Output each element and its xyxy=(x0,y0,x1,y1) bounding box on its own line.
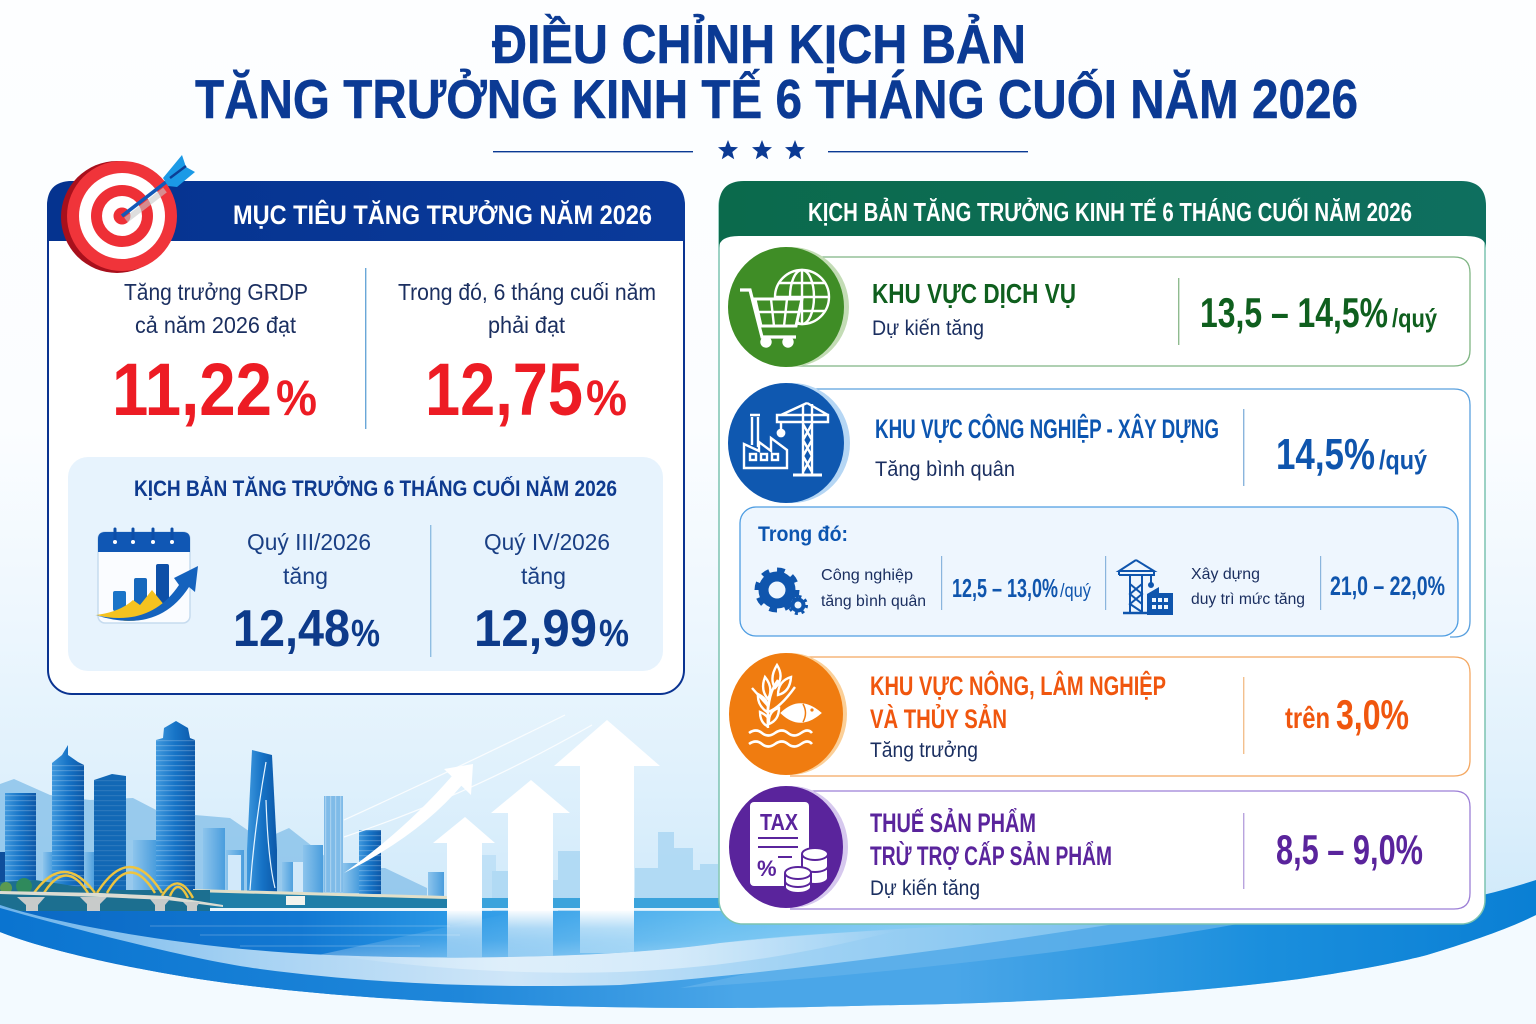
row: product tax: TRỪ TRỢ CẤP SẢN PHẨM xyxy=(870,839,1112,871)
row: services: Dự kiến tăng xyxy=(872,317,984,340)
title: ĐIỀU CHỈNH KỊCH BẢN xyxy=(492,13,1026,75)
far bank xyxy=(193,891,447,910)
white growth arrows xyxy=(433,720,660,957)
sub-card: breakdown: /quý xyxy=(1060,581,1091,602)
divider xyxy=(430,525,431,657)
row: agriculture, forestry, fishery: trên xyxy=(1285,702,1330,735)
divider xyxy=(365,268,366,429)
stat: GRDP full year xyxy=(112,279,317,431)
mountains xyxy=(0,779,427,915)
row: product tax xyxy=(729,786,1470,909)
panel header xyxy=(47,181,685,241)
row: industry and construction: KHU VỰC CÔNG NGHIỆP - XÂY DỰNG xyxy=(875,413,1219,444)
stat: GRDP full year: % xyxy=(276,370,317,426)
stat: Q3: tăng xyxy=(283,563,328,589)
title xyxy=(195,13,1358,130)
stat: Q4 xyxy=(474,529,629,658)
title ornament: stars xyxy=(493,140,1028,159)
bridge xyxy=(0,867,223,914)
curved arrow xyxy=(344,764,473,873)
row: product tax: 8,5 – 9,0% xyxy=(1276,826,1423,873)
stat: last 6 months: Trong đó, 6 tháng cuối năm xyxy=(398,279,656,305)
icon: tax document and coins: TAX xyxy=(760,809,799,835)
row: agriculture, forestry, fishery: VÀ THỦY SẢN xyxy=(870,702,1007,734)
row: industry and construction: Tăng bình quân xyxy=(875,458,1015,481)
row: agriculture, forestry, fishery xyxy=(729,653,1470,776)
icon: calendar with chart xyxy=(95,529,198,623)
row: services: KHU VỰC DỊCH VỤ xyxy=(872,278,1076,309)
icon: tax document and coins: % xyxy=(757,856,777,881)
stat: last 6 months: % xyxy=(586,370,627,426)
sub-card: breakdown: 12,5 – 13,0% xyxy=(952,573,1058,603)
icon: gears xyxy=(758,570,806,614)
stat: Q4: 12,99 xyxy=(474,600,597,658)
stat: GRDP full year: 11,22 xyxy=(112,348,272,431)
stat: Q4: % xyxy=(599,613,629,655)
stat: last 6 months xyxy=(398,279,656,431)
icon: plant, fish and waves xyxy=(749,665,820,746)
sub-card: breakdown: 21,0 – 22,0% xyxy=(1330,571,1445,601)
light band xyxy=(0,905,1140,986)
icon: crane and building xyxy=(1119,560,1173,615)
sub-card: breakdown: Trong đó: xyxy=(758,523,848,546)
pale band highlight xyxy=(330,930,900,973)
row: services: /quý xyxy=(1392,303,1437,333)
icon: factory and crane xyxy=(744,403,828,475)
icon: tax document and coins xyxy=(750,802,828,893)
stat: last 6 months: 12,75 xyxy=(425,348,583,431)
panel heading: MỤC TIÊU TĂNG TRƯỞNG NĂM 2026 xyxy=(233,198,652,230)
stat: Q3: Quý III/2026 xyxy=(247,529,371,555)
row: product tax: THUẾ SẢN PHẨM xyxy=(870,806,1036,838)
sub-panel heading: KỊCH BẢN TĂNG TRƯỞNG 6 THÁNG CUỐI NĂM 2026 xyxy=(134,475,617,501)
row: industry and construction: /quý xyxy=(1379,445,1427,475)
row: services: 13,5 – 14,5% xyxy=(1200,289,1388,336)
panel: sector scenarios xyxy=(719,181,1486,924)
row: agriculture, forestry, fishery: Tăng trưởng xyxy=(870,739,978,762)
water xyxy=(0,911,1536,1010)
trend lines xyxy=(344,715,592,837)
panel: growth targets 2026 xyxy=(47,155,685,694)
sub-card: breakdown: duy trì mức tăng xyxy=(1191,591,1305,608)
outer wave streak xyxy=(680,920,1260,988)
sub-card: breakdown: tăng bình quân xyxy=(821,593,926,610)
sub-card: breakdown xyxy=(740,507,1458,636)
stat: Q4: Quý IV/2026 xyxy=(484,529,610,555)
row: industry and construction: 14,5% xyxy=(1276,430,1375,479)
panel header xyxy=(719,181,1486,248)
towers xyxy=(0,721,381,918)
row: agriculture, forestry, fishery: 3,0% xyxy=(1336,691,1409,738)
stat: GRDP full year: cả năm 2026 đạt xyxy=(135,312,297,338)
stat: Q3 xyxy=(233,529,380,658)
stat: GRDP full year: Tăng trưởng GRDP xyxy=(124,279,308,305)
blue band xyxy=(0,880,1536,1008)
row: industry and construction xyxy=(728,383,1470,637)
icon: cart and globe xyxy=(740,270,829,346)
skyline illustration xyxy=(0,715,1536,1010)
row: agriculture, forestry, fishery: KHU VỰC NÔNG, LÂM NGHIỆP xyxy=(870,670,1166,701)
sub-card: breakdown: Xây dựng xyxy=(1191,566,1260,583)
white ground below wave xyxy=(0,915,1536,1024)
stat: Q3: 12,48 xyxy=(233,600,350,658)
row: product tax: Dự kiến tăng xyxy=(870,877,980,900)
sub-panel: quarterly scenario xyxy=(68,457,663,671)
bottom wave xyxy=(0,880,1536,1024)
stat: last 6 months: phải đạt xyxy=(488,312,566,338)
title: TĂNG TRƯỞNG KINH TẾ 6 THÁNG CUỐI NĂM 2026 xyxy=(195,68,1358,130)
background buildings xyxy=(43,828,444,902)
row: services xyxy=(728,247,1470,367)
sub-card: breakdown: Công nghiệp xyxy=(821,567,913,584)
faded right skyline xyxy=(482,832,718,911)
icon: target with dart xyxy=(61,155,195,273)
stat: Q4: tăng xyxy=(521,563,566,589)
stat: Q3: % xyxy=(351,613,380,655)
